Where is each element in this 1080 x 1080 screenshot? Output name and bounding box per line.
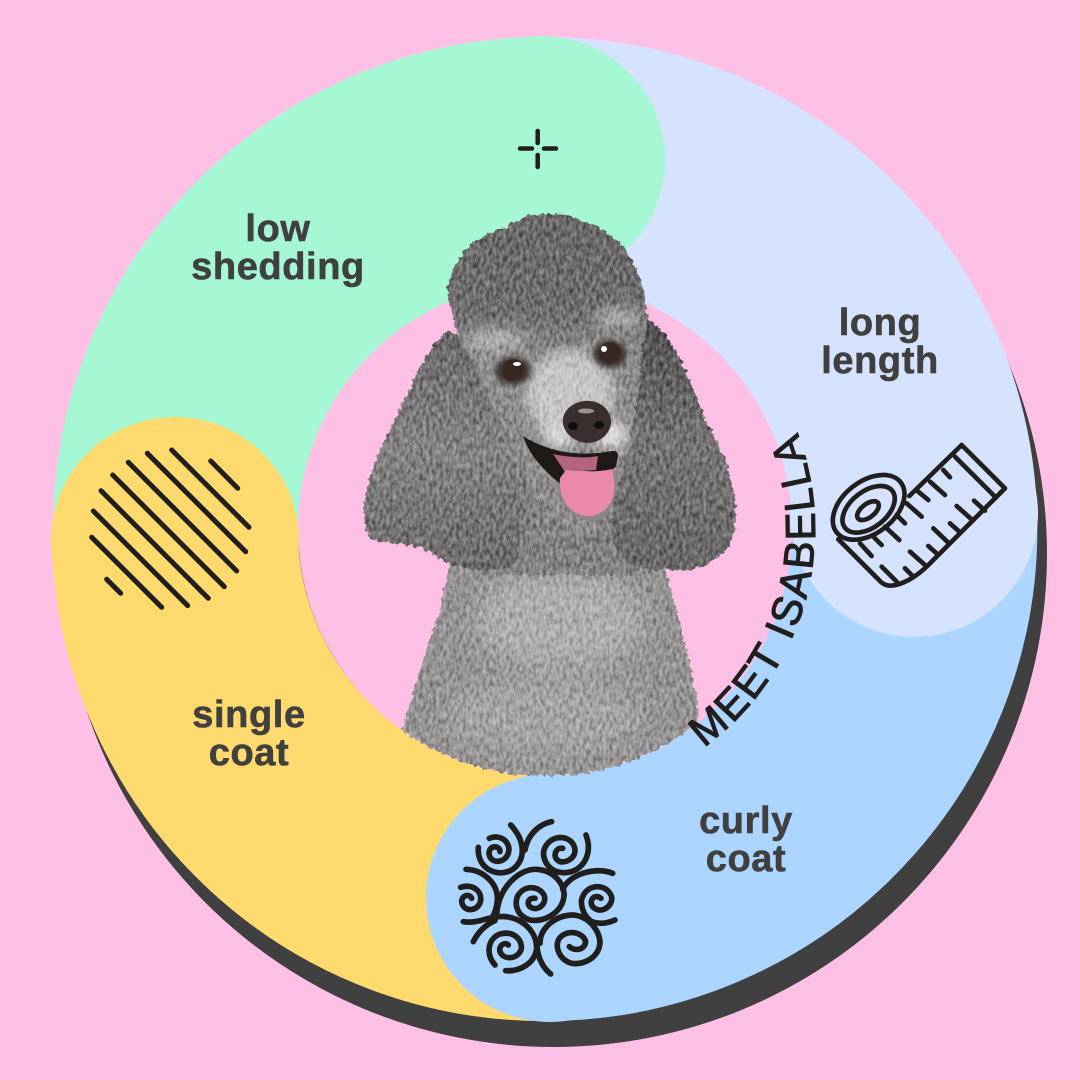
poodle fur [364, 213, 735, 800]
topknot [447, 213, 647, 374]
left eye [495, 357, 531, 385]
label: single coat: single [192, 694, 306, 736]
nostrils [568, 421, 604, 430]
label: long length: length [821, 340, 939, 382]
lower jaw [556, 470, 618, 522]
segment: low shedding [176, 160, 545, 529]
roll core [854, 498, 882, 524]
iris [502, 359, 524, 381]
face [470, 315, 642, 535]
label: low shedding: shedding [191, 246, 365, 288]
nose shape [563, 401, 611, 443]
panel: ring of four coloured segments [175, 160, 914, 898]
eye socket [593, 340, 627, 368]
body and chest [400, 563, 700, 778]
nose [563, 401, 611, 443]
left swirl [461, 869, 497, 918]
icon: curly coat swirls [461, 822, 615, 974]
head: blue [426, 774, 674, 1022]
left brow highlight [465, 328, 525, 352]
nose highlight [578, 408, 594, 414]
roll outer edge [821, 462, 917, 553]
iris [599, 342, 621, 364]
left ear [364, 330, 526, 570]
top right swirl [525, 822, 588, 873]
snout highlight [544, 421, 572, 449]
segment: single coat [175, 541, 550, 898]
tongue back [553, 454, 598, 472]
glint [601, 346, 607, 352]
icon: target crosshair [520, 131, 556, 167]
tape outline [838, 445, 1005, 586]
head: lavender [790, 389, 1038, 637]
label: low shedding: low [245, 208, 311, 250]
head: yellow [51, 417, 299, 665]
label: long length: long [839, 302, 921, 344]
label: curly coat: coat [706, 838, 786, 880]
title baseline arc [704, 415, 815, 747]
right ear [612, 316, 735, 570]
label: curly coat: curly [699, 800, 793, 842]
eye socket [495, 357, 531, 385]
head: green [417, 36, 665, 284]
centre swirl [497, 869, 564, 920]
icon: hatched circle [92, 450, 249, 607]
curved title: MEET ISABELLA [687, 432, 816, 746]
chest highlights [475, 570, 645, 670]
right swirl [563, 871, 615, 923]
right brow highlight [594, 306, 642, 330]
glint [513, 362, 521, 366]
top left swirl [478, 825, 522, 873]
bottom left swirl [463, 917, 537, 971]
photo: grey poodle [364, 213, 735, 800]
roll rings [834, 477, 903, 542]
ring centre hole [298, 282, 792, 776]
cheek highlight [597, 421, 627, 449]
neck [480, 440, 640, 575]
icon: measuring tape [821, 445, 1005, 586]
bottom right swirl [537, 915, 600, 974]
chest lower highlights [445, 675, 645, 755]
tape ticks [860, 457, 995, 582]
muzzle highlight [526, 350, 614, 440]
mouth [523, 436, 618, 486]
tongue [560, 469, 614, 516]
label: single coat: coat [209, 732, 289, 774]
segment: curly coat [550, 513, 914, 898]
segment: long length [545, 160, 914, 513]
right eye [593, 340, 627, 368]
